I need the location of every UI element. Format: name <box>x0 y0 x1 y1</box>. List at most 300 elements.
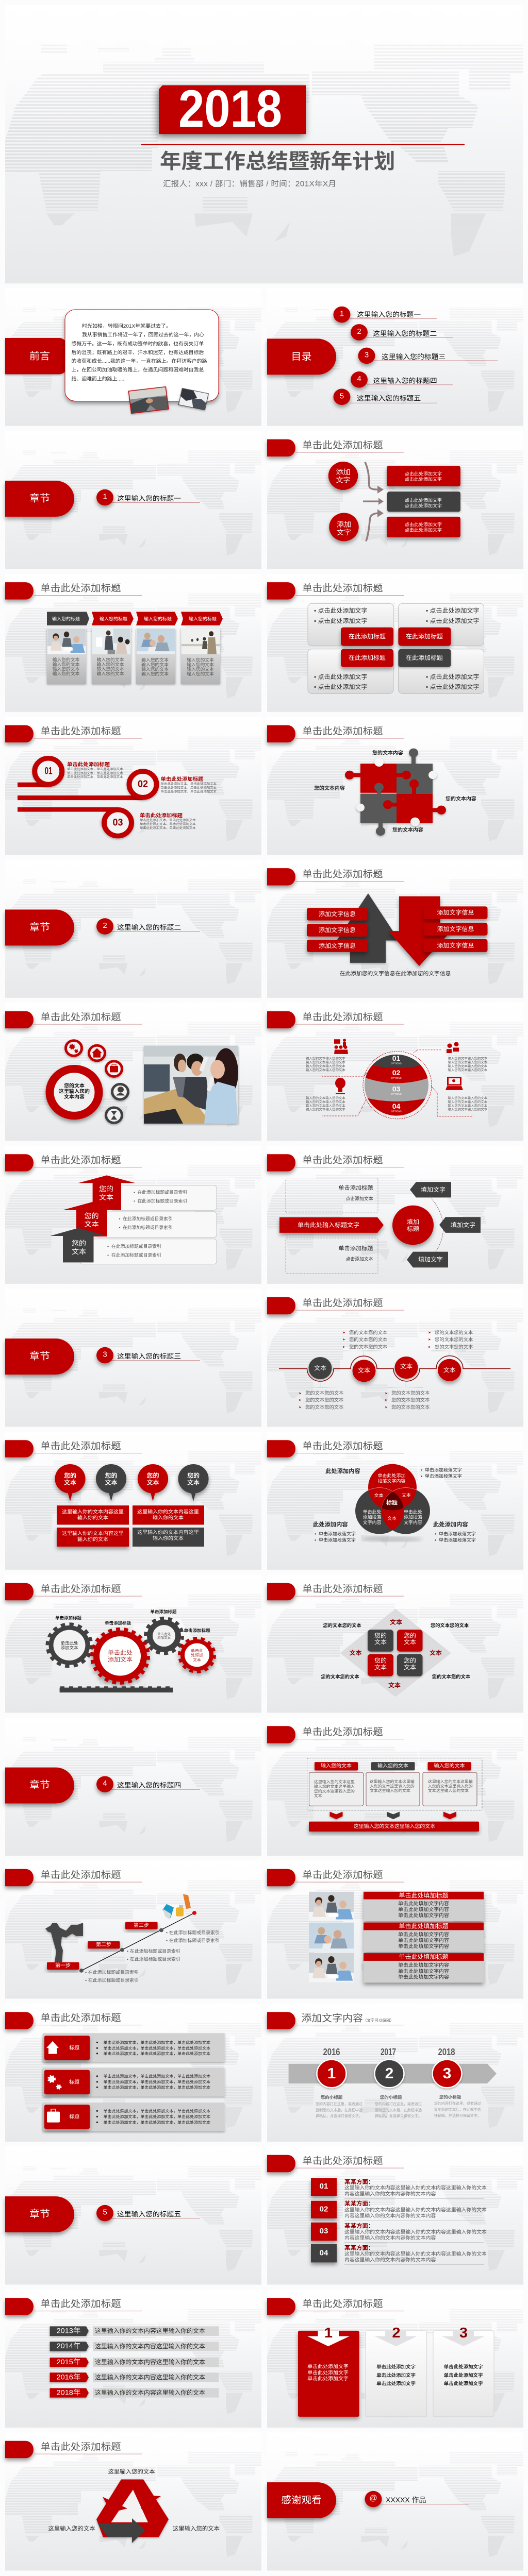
row 2: ● <box>96 2085 98 2090</box>
quadrant bottom right <box>398 649 484 693</box>
row 2 <box>43 2067 225 2096</box>
gear dark large: 单击此处 <box>61 1640 78 1646</box>
arrow 1: 文本 <box>99 1194 113 1201</box>
quadrant top left: • 点击此处添加文字 <box>314 607 367 614</box>
contents item 5 <box>333 389 437 405</box>
box bottom left: 输入你的文本 <box>77 1536 108 1543</box>
list bottom 1: ➤ <box>299 1392 302 1395</box>
text block top right <box>448 1056 488 1072</box>
title <box>5 582 142 600</box>
title: 单击此处添加标题 <box>302 440 383 451</box>
title <box>267 439 404 456</box>
list bottom 2: 您的文本您的文本 <box>391 1390 430 1396</box>
notes step 1: 在此添加标题或目录索引 <box>88 1969 139 1975</box>
note 2: 择粘贴，并选择只保留文字。 <box>375 2114 422 2119</box>
ring 03 <box>18 807 131 836</box>
card 2: 输入您的文本 <box>97 662 124 667</box>
aspect 01: 01 <box>320 2182 328 2191</box>
row 1 <box>43 2033 225 2062</box>
list bottom 2 <box>385 1390 430 1410</box>
pin 4: 您的 <box>187 1472 200 1479</box>
note 2: 您的内容打在这里，或者通过 <box>375 2102 422 2106</box>
callout left: 单击添加段落文字 <box>319 1537 356 1543</box>
hexagon 3: 填加文字 <box>418 1256 443 1263</box>
hexagon 3 <box>407 1252 448 1267</box>
red banner <box>279 1217 384 1233</box>
diamond labels: 文本 <box>430 1649 442 1656</box>
row 1: 单击此处添加文本，单击此处添加文本，单击此处添加文本 <box>104 2045 210 2050</box>
card 3 <box>136 612 178 684</box>
text block top left: 输入您的文本输入您的文本 <box>306 1056 345 1061</box>
panel 2: 单击此处填加文字内容 <box>398 1937 449 1943</box>
column 3: 文本这里输入您的文本 <box>428 1788 469 1793</box>
row 3: ● <box>96 2109 98 2113</box>
card 3: 输入您的文本 <box>141 671 169 676</box>
circle 1 <box>328 462 358 490</box>
slide: climbing steps <box>5 1860 261 1998</box>
card 1: 单击此处添加文字 <box>307 2375 349 2382</box>
slide: icon rows <box>5 2004 261 2142</box>
hexagon 1: 填加文字 <box>421 1186 446 1193</box>
title: 单击此处添加标题 <box>302 1012 383 1023</box>
year row 2014: 2014年 <box>57 2342 80 2350</box>
callout top: 单击添加段落文字 <box>425 1473 462 1479</box>
left labels: 添加文字信息 <box>319 926 356 934</box>
chapter tab <box>5 2196 74 2232</box>
sphere: 02 <box>392 1069 401 1077</box>
corner labels <box>321 1622 470 1679</box>
list box 1 <box>111 1185 217 1210</box>
icon: computer <box>446 1077 463 1090</box>
panel 1: 单击此处填加标题 <box>399 1892 449 1899</box>
contents item 3: 这里输入您的标题三 <box>382 353 446 361</box>
row 2: 单击此处添加文本，单击此处添加文本，单击此处添加文本 <box>104 2073 210 2078</box>
slide: chapter 2 <box>5 860 261 998</box>
aspect 02: 内容这里输入你的文本内容你的文本内容 <box>344 2213 436 2219</box>
year row 2013: 这里输入你的文本内容这里输入你的文本 <box>95 2327 205 2334</box>
title: （文字可以编辑） <box>363 2018 394 2023</box>
year row 2015: 2015年 <box>57 2358 80 2366</box>
slide: hub and hexagons <box>267 1146 523 1284</box>
quadrant top left: 在此添加标题 <box>349 633 386 640</box>
callout left <box>313 1521 356 1543</box>
square top left: 您的 <box>374 1632 387 1639</box>
quadrant top right: • 点击此处添加文字 <box>426 607 479 614</box>
card 2: 2 <box>392 2325 401 2341</box>
square top right: 您的 <box>404 1632 416 1639</box>
text block top right: 输入您的文本输入您的文本 <box>448 1067 488 1072</box>
row 3: 单击此处添加文本，单击此处添加文本，单击此处添加文本 <box>104 2120 210 2124</box>
venn diagram: 文本 <box>387 1515 397 1521</box>
big ring: 文本内容 <box>64 1093 85 1100</box>
card 1: 单击此处添加文字 <box>307 2363 349 2370</box>
step 3 <box>125 1922 158 1929</box>
notes step 3: 在此添加标题或目录索引 <box>169 1938 220 1943</box>
aspect 03: 这里输入你的文本内容这里输入你的文本内容这里输入你的文本 <box>344 2229 487 2235</box>
red year block: 2018 <box>178 79 282 139</box>
contents item 2: 这里输入您的标题二 <box>373 329 437 337</box>
text block bottom left: 输入您的文本输入您的文本 <box>306 1104 345 1108</box>
box bottom right: 输入你的文本 <box>153 1535 184 1541</box>
gear labels <box>55 1609 210 1633</box>
title <box>267 2155 404 2172</box>
recycle label left: 这里输入您的文本 <box>48 2525 95 2532</box>
icon: hourglass <box>106 1108 122 1123</box>
callout right: • <box>435 1537 436 1543</box>
title rule <box>141 144 465 145</box>
contents item 3 <box>358 348 498 364</box>
aspect 04 <box>311 2244 487 2265</box>
quadrant bottom right: • 点击此处添加文字 <box>426 673 479 680</box>
chapter tab <box>5 1768 74 1803</box>
box 2: 点击此处添加文字 <box>405 497 442 503</box>
callout right: 单击添加段落文字 <box>439 1537 476 1543</box>
card 3: 单击此处添加文字 <box>444 2381 483 2386</box>
list box 3: 在此添加标题或目录索引 <box>111 1243 161 1249</box>
diamond labels: 文本 <box>350 1649 362 1656</box>
note 3: 您的小标题 <box>439 2094 461 2099</box>
venn diagram <box>355 1464 430 1534</box>
square bottom right: 您的 <box>404 1657 416 1664</box>
title: 单击此处添加标题 <box>302 726 383 737</box>
column 2: 文本这里输入您的文本 <box>370 1788 410 1793</box>
icon: briefcase <box>106 1061 122 1076</box>
title <box>5 1154 142 1172</box>
card 2: 单击此处添加文字 <box>376 2372 416 2378</box>
slide: year list <box>5 2290 261 2428</box>
panel 1: 单击此处填加文字内容 <box>398 1900 449 1907</box>
pin 4: 文本 <box>187 1479 200 1486</box>
card 3: 输入您的文本 <box>141 666 169 672</box>
icon: people <box>112 1084 128 1099</box>
box 1: 点击此处添加文字 <box>405 471 442 477</box>
title: 添加文字内容 <box>301 2013 363 2024</box>
card 3 <box>433 2325 494 2417</box>
preface card: 结、迎难而上的路上...... <box>71 376 126 382</box>
note 3: 您的内容打在这里，或者通过 <box>434 2101 481 2106</box>
left labels: 添加文字信息 <box>319 910 356 918</box>
aspect 02 <box>311 2200 487 2221</box>
chapter item: 1 <box>103 493 107 501</box>
sphere: OPTIONS <box>391 1077 402 1079</box>
quadrant bottom left: • 点击此处添加文字 <box>314 683 367 690</box>
contents tab <box>267 338 336 375</box>
year row 2015: 这里输入你的文本内容这里输入你的文本 <box>95 2359 205 2366</box>
box top left: 这里输入你的文本内容这里 <box>62 1509 124 1515</box>
big ring <box>50 1069 99 1116</box>
column 2 <box>366 1762 420 1806</box>
arrow 1 <box>78 1175 135 1210</box>
aspect 04: 这里输入你的文本内容这里输入你的文本内容这里输入你的文本 <box>344 2251 487 2257</box>
quadrant top right: • 点击此处添加文字 <box>426 617 479 624</box>
pin 2: 文本 <box>105 1479 118 1486</box>
title <box>267 1440 404 1458</box>
contents item 5: 5 <box>340 393 344 400</box>
aspect 04: 04 <box>320 2249 328 2258</box>
title <box>5 2441 142 2458</box>
list top 2: ➤ <box>428 1338 431 1341</box>
title <box>267 1011 404 1028</box>
puzzle label right: 您的文本内容 <box>446 795 476 802</box>
venn diagram: 文本 <box>402 1492 411 1498</box>
list bottom 2: ➤ <box>385 1392 388 1395</box>
slide: chapter 4 <box>5 1718 261 1856</box>
node 1 <box>308 1357 332 1379</box>
aspect 02: 这里输入你的文本内容这里输入你的文本内容这里输入你的文本 <box>344 2207 487 2213</box>
list box 2: • <box>119 1216 121 1221</box>
box 1 <box>387 466 460 486</box>
column 1 <box>309 1762 363 1806</box>
corner labels: 您的文本您的文本 <box>432 1674 470 1679</box>
text block bottom left: 输入您的文本输入您的文本 <box>306 1096 345 1100</box>
row 1: ● <box>96 2051 98 2056</box>
year 2018: 3 <box>443 2065 451 2082</box>
slide: contents <box>267 288 523 426</box>
note 3: 择粘贴，并选择只保留文字。 <box>434 2113 481 2118</box>
panel 2: 单击此处填加标题 <box>399 1923 449 1930</box>
step 2 <box>88 1941 120 1948</box>
contents item 1 <box>333 307 437 323</box>
note 1: 复制您的文本后，在此框中选 <box>316 2108 362 2112</box>
title: 单击此处添加标题 <box>40 1584 121 1595</box>
left labels <box>307 908 367 952</box>
big ring: 您的文本 <box>64 1082 85 1089</box>
card 4: 输入您的文本 <box>187 657 214 663</box>
title: 单击此处添加标题 <box>302 1298 383 1309</box>
aspect 02: 02 <box>320 2206 328 2213</box>
list bottom 2: ➤ <box>385 1398 388 1402</box>
column 1: 这里输入您的文本这里 <box>314 1779 355 1784</box>
quadrant bottom right: 在此添加标题 <box>406 654 443 661</box>
title: 单击此处添加标题 <box>302 1584 383 1595</box>
card 3: 3 <box>459 2325 468 2341</box>
pin 1: 文本 <box>64 1479 76 1486</box>
year row 2013: 2013年 <box>57 2327 80 2335</box>
puzzle label top: 您的文本内容 <box>372 750 403 756</box>
circle 1: 添加 <box>336 468 350 476</box>
hexagon 2 <box>439 1217 481 1233</box>
arrow 2 <box>63 1202 121 1236</box>
arrow 2: 文本 <box>85 1221 99 1228</box>
list top 1: ➤ <box>342 1338 345 1341</box>
slide: phone team <box>5 1003 261 1141</box>
slide: venn <box>267 1432 523 1570</box>
sphere: OPTIONS <box>391 1062 402 1065</box>
pin 3: 您的 <box>147 1472 159 1479</box>
aspect 01: 这里输入你的文本内容这里输入你的文本内容这里输入你的文本 <box>344 2185 487 2191</box>
climber silhouette <box>45 1923 83 1962</box>
row 2: 单击此处添加文本，单击此处添加文本，单击此处添加文本 <box>104 2084 210 2090</box>
notes step 3: • <box>166 1938 168 1943</box>
callout right: 单击添加段落文字 <box>439 1531 476 1536</box>
row 2: ● <box>96 2079 98 2084</box>
right labels: 添加文字信息 <box>437 942 474 949</box>
quadrant top right <box>398 603 484 646</box>
icon: head <box>335 1078 345 1094</box>
row 3: ● <box>96 2114 98 2119</box>
notes step 1: • <box>85 1978 87 1982</box>
text block bottom right: 输入您的文本输入您的文本 <box>448 1104 488 1108</box>
chapter item: 这里输入您的标题五 <box>117 2210 181 2218</box>
box bottom right <box>133 1528 204 1547</box>
note 1: 您的内容打在这里，或者通过 <box>316 2102 362 2106</box>
preface card: 的收获和成长......我的这一年，一直在路上。在拜访客户的路 <box>71 358 207 364</box>
chapter tab: 章节 <box>29 1351 50 1362</box>
callout top: • <box>421 1467 422 1472</box>
list box 3: • <box>107 1252 109 1258</box>
slide: numbered aspects <box>267 2147 523 2284</box>
ring 02 text: 单击此处添加文本，单击此处添加文本 <box>161 782 217 786</box>
chapter tab <box>5 1338 74 1375</box>
node 4 <box>438 1359 461 1381</box>
slide: four photo cards <box>5 574 261 712</box>
row 3: 标题 <box>69 2114 79 2120</box>
callout top <box>325 1467 462 1479</box>
square top left: 文本 <box>374 1638 387 1646</box>
card 1: 输入您的文本 <box>53 657 80 662</box>
panel 3 <box>364 1953 484 1982</box>
aspect 01: 内容这里输入你的文本内容你的文本内容 <box>344 2191 436 2197</box>
ring 02 text: 单击此处添加文本，单击此处添加文本 <box>161 789 217 793</box>
hub circle <box>392 1206 434 1245</box>
chapter item <box>96 2205 200 2221</box>
card 2: 单击此处添加文字 <box>376 2364 416 2369</box>
dotted connectors <box>304 1351 466 1387</box>
column 3: 入您的文本这里输入您的 <box>428 1784 473 1788</box>
box bottom right: 这里输入你的文本内容这里 <box>137 1529 199 1535</box>
sphere: OPTIONS <box>391 1110 402 1112</box>
callout right: 此处添加内容 <box>433 1521 468 1528</box>
contents item 4 <box>351 371 453 388</box>
box 3: 点击此处添加文字 <box>405 521 442 527</box>
title: 单击此处添加标题 <box>40 583 121 594</box>
list box 2: 在此添加标题或目录索引 <box>123 1216 173 1221</box>
diamond labels <box>350 1619 442 1689</box>
notes step 1 <box>85 1969 139 1982</box>
step line <box>79 1911 196 1973</box>
arc connector <box>432 1198 443 1252</box>
title: 单击此处添加标题 <box>302 1155 383 1166</box>
hub circle: 填加 <box>407 1218 419 1226</box>
notes step 2 <box>127 1948 180 1961</box>
contents item 5: 这里输入您的标题五 <box>357 394 421 402</box>
year 2016 <box>317 2047 346 2088</box>
square bottom left: 文本 <box>374 1664 387 1671</box>
title: 单击此处添加标题 <box>40 2298 121 2310</box>
year row 2016: 这里输入你的文本内容这里输入你的文本 <box>95 2374 205 2381</box>
slide: four quadrants <box>267 574 523 712</box>
notes step 1: • <box>85 1970 87 1975</box>
list top 2: 您的文本您的文本 <box>435 1344 473 1349</box>
icon: house with coins <box>162 1894 191 1919</box>
contents item 4: 4 <box>357 375 361 383</box>
cover title: 年度工作总结暨新年计划 <box>160 149 395 173</box>
ring 03 text: 单击此处添加标题 <box>140 812 183 819</box>
preface card: 后的沮丧；既有路上的艰辛、汗水和迷茫，也有达成目标后 <box>71 349 204 356</box>
title: 单击此处添加标题 <box>40 1870 121 1880</box>
slide: preface <box>5 288 261 426</box>
icon: house <box>89 1045 105 1061</box>
year 2016: 1 <box>327 2065 336 2082</box>
notes step 3: • <box>166 1930 168 1935</box>
notes step 2: • <box>127 1948 128 1954</box>
column 1: 输入您的文本 <box>321 1762 352 1769</box>
column 1: 您的文本这里输入您的 <box>314 1788 355 1793</box>
gear red small: 文本 <box>193 1657 201 1662</box>
recycle label top: 这里输入您的文本 <box>108 2468 155 2475</box>
year row 2018 <box>50 2388 219 2398</box>
node 2: 文本 <box>358 1367 370 1374</box>
box bottom left <box>57 1528 129 1547</box>
quadrant bottom right: • 点击此处添加文字 <box>426 683 479 690</box>
box bottom left: 这里输入你的文本内容这里 <box>62 1530 124 1536</box>
panel 3: 单击此处填加文字内容 <box>398 1962 449 1969</box>
step 3: 第三步 <box>134 1922 149 1928</box>
gear dark large <box>47 1624 91 1666</box>
card 2 <box>92 612 134 684</box>
aspect 03 <box>311 2222 487 2243</box>
slide: puzzle <box>267 717 523 855</box>
callout top: • <box>421 1473 422 1479</box>
square top left <box>368 1630 393 1652</box>
panel 3: 单击此处填加文字内容 <box>398 1974 449 1980</box>
circle 2: 添加 <box>337 521 351 529</box>
contents item 2: 2 <box>357 328 361 336</box>
gear red small: 处添加 <box>191 1652 203 1657</box>
title: 单击此处添加标题 <box>40 726 121 737</box>
chapter item: 这里输入您的标题二 <box>117 923 181 931</box>
quadrant bottom left: 在此添加标题 <box>349 654 386 661</box>
slide: up and down arrows <box>267 860 523 998</box>
ring 03 text: 单击此处添加文本，单击此处添加文本 <box>140 822 196 826</box>
text block top right: 输入您的文本输入您的文本 <box>448 1060 488 1064</box>
card 2: 输入您的文本 <box>97 671 124 676</box>
node 4: 文本 <box>443 1366 456 1374</box>
title <box>267 2012 404 2029</box>
card 1: 单击此处添加文字 <box>307 2369 349 2376</box>
contents item 4: 这里输入您的标题四 <box>373 377 437 385</box>
title: 单击此处添加标题 <box>302 2156 383 2166</box>
big ring: 这里输入您的 <box>59 1088 90 1095</box>
notes step 2: 在此添加标题或目录索引 <box>130 1956 180 1961</box>
sphere: 03 <box>392 1086 401 1093</box>
corner labels: 您的文本您的文本 <box>321 1674 359 1679</box>
node 3: 文本 <box>400 1363 412 1370</box>
list top 1: 您的文本您的文本 <box>349 1336 387 1342</box>
notes step 3 <box>166 1929 220 1943</box>
diamond <box>340 1608 451 1697</box>
dashed box top <box>286 1178 378 1213</box>
quadrant bottom left <box>308 649 393 693</box>
photo: hands <box>178 388 209 410</box>
card 4: 输入您的标题 <box>189 616 217 621</box>
aspect 03: 某某方面： <box>344 2222 374 2229</box>
year 2017: 2 <box>385 2065 393 2082</box>
list box 3: • <box>107 1244 109 1249</box>
slide: stacked arrows <box>5 1146 261 1284</box>
panel 3: 单击此处填加标题 <box>399 1953 449 1960</box>
year row 2015 <box>50 2358 219 2367</box>
square bottom left <box>368 1654 393 1676</box>
ring 01 <box>18 758 62 787</box>
recycle label right: 这里输入您的文本 <box>173 2525 220 2532</box>
dashed box bottom: 单击添加标题 <box>338 1245 373 1251</box>
panel 2: 单击此处填加文字内容 <box>398 1943 449 1950</box>
card 3: 输入您的文本 <box>141 662 169 667</box>
puzzle pieces <box>345 749 446 836</box>
list top 2: 您的文本您的文本 <box>435 1336 473 1342</box>
column 2: 这里输入您的文本这里输 <box>370 1779 415 1784</box>
